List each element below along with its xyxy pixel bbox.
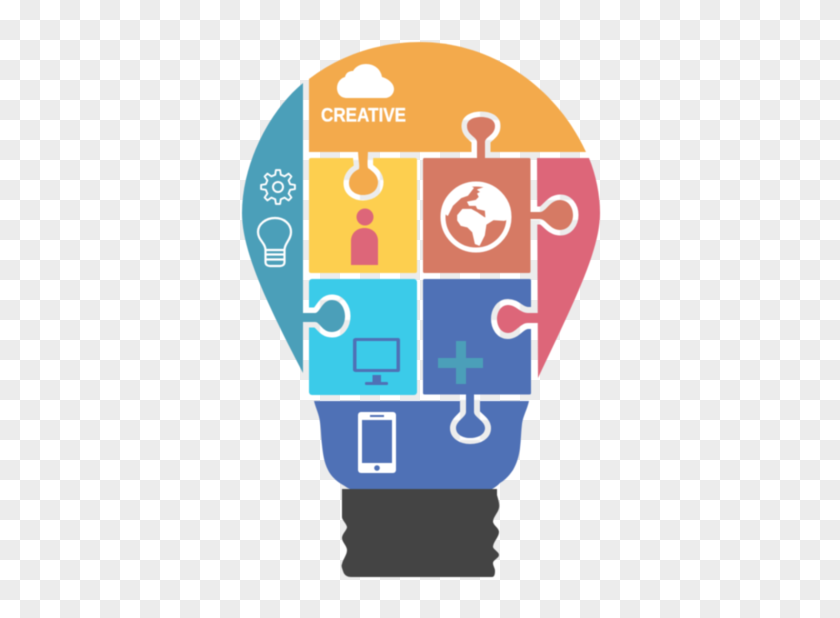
panel: teal segment <box>242 83 303 373</box>
panel: blue bulb base <box>314 401 529 489</box>
icon: globe <box>443 184 510 250</box>
orange puzzle tab <box>349 148 378 195</box>
heading: CREATIVE: CREATIVE <box>321 106 406 126</box>
terracotta right puzzle tab <box>528 200 573 230</box>
teal puzzle tab <box>300 300 345 332</box>
icon: plus <box>438 341 483 384</box>
panel: pink segment <box>537 158 600 378</box>
pink puzzle tab <box>497 305 539 333</box>
icon: smartphone <box>358 412 396 473</box>
panel: cyan square <box>309 279 417 395</box>
terracotta top puzzle tab <box>467 117 495 160</box>
icon: cloud <box>337 64 394 98</box>
blue puzzle tab <box>456 390 485 438</box>
panel: blue square <box>423 279 531 394</box>
icon: monitor <box>353 338 400 385</box>
panel: terracotta square <box>423 158 530 273</box>
bulb socket <box>342 489 499 577</box>
icon: light bulb <box>258 218 291 266</box>
panel: orange top segment <box>309 42 586 152</box>
icon: person <box>351 208 378 265</box>
light bulb puzzle infographic <box>242 42 600 577</box>
panel: yellow square <box>309 158 417 273</box>
icon: gear <box>261 170 295 204</box>
